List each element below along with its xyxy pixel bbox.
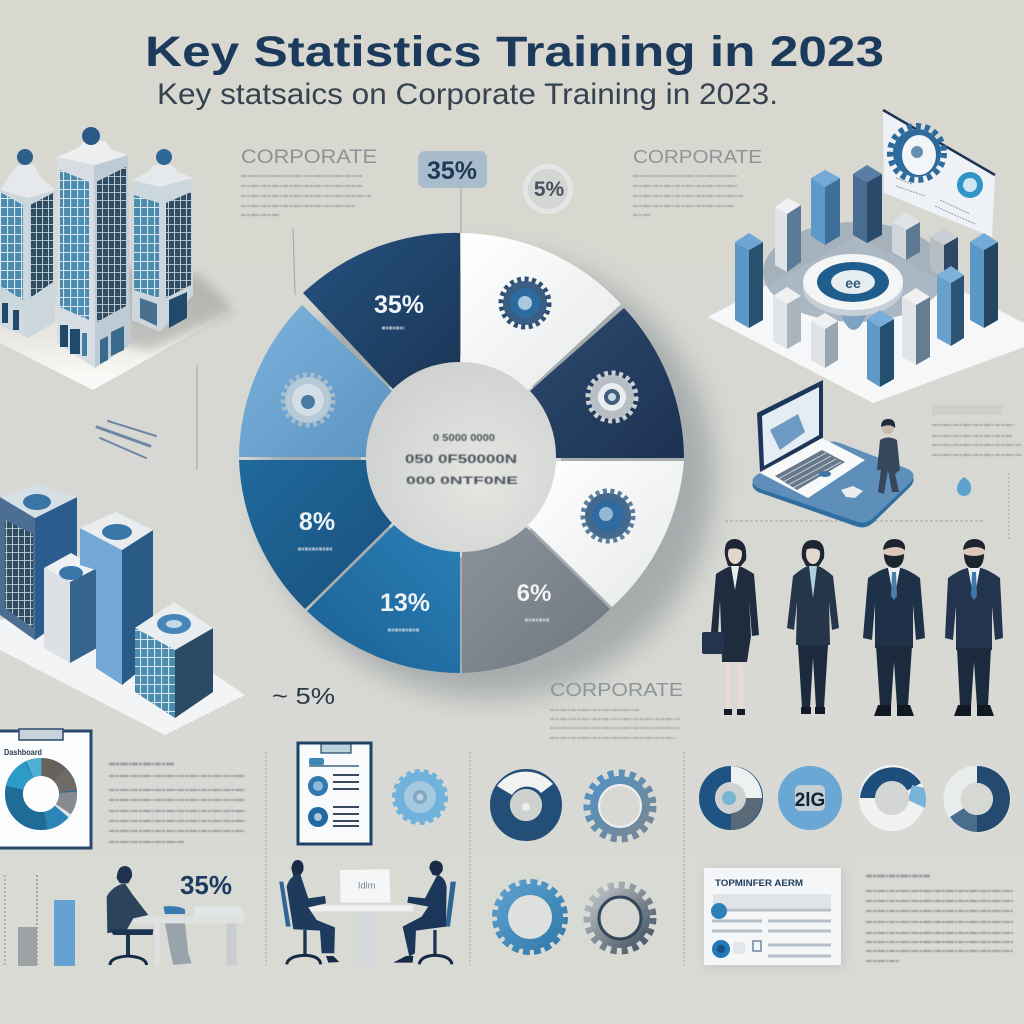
bar: back right white xyxy=(892,212,920,260)
icon: gear blue gray xyxy=(587,773,653,839)
panel: clipboard with donut xyxy=(0,729,91,848)
badge: 35%: 35% xyxy=(427,157,477,185)
panel: laptop and person xyxy=(752,380,914,527)
screen xyxy=(883,110,995,237)
icon: blue badge: 2lG xyxy=(795,790,825,811)
label: corporate lower: CORPORATE xyxy=(550,680,683,700)
text: donut centre xyxy=(405,433,518,487)
text: donut centre: 0 5000 0000 xyxy=(433,433,495,444)
text block: clipboard note xyxy=(109,764,245,842)
block: front xyxy=(135,602,213,718)
segment: navy right xyxy=(530,308,684,458)
icon: blue badge xyxy=(778,766,842,830)
text block: corporate right xyxy=(633,176,744,215)
segment: gray xyxy=(462,527,610,673)
value: 8%: 8% xyxy=(299,508,335,536)
icon: gear blue xyxy=(495,882,565,952)
text block: right of laptop xyxy=(932,405,1022,455)
icon: donut white navy xyxy=(497,772,553,831)
block: tall xyxy=(0,484,77,640)
gear: navy segment xyxy=(588,373,636,421)
badge: 35% xyxy=(418,151,487,188)
bar: back right gray xyxy=(930,228,958,277)
segment: white lower right xyxy=(528,461,684,607)
text: donut centre: 050 0F50000N xyxy=(405,452,517,466)
chart: small bars xyxy=(5,875,75,966)
segment: navy top xyxy=(303,233,460,389)
text block: corporate left xyxy=(241,176,371,215)
bar: back white xyxy=(775,198,801,272)
bar: front white xyxy=(902,288,930,365)
panel: corporate buildings xyxy=(0,127,245,390)
scene: two people at table xyxy=(279,860,456,967)
panel: clipboard with list xyxy=(298,743,371,844)
chart: main donut xyxy=(239,233,714,698)
badge: 5%: 5% xyxy=(534,178,564,201)
segment: white top xyxy=(461,233,621,390)
bar: front left white xyxy=(773,287,801,349)
bar: front right blue xyxy=(937,266,964,346)
person: woman with briefcase xyxy=(702,539,759,715)
chart: clipboard donut xyxy=(3,756,79,832)
person: man right xyxy=(945,539,1003,716)
block: medium tall xyxy=(80,512,153,685)
icon: decorative slashes xyxy=(97,421,156,458)
bar: front centre white xyxy=(811,313,838,368)
gear: light blue segment xyxy=(283,375,333,425)
callout: 5%: ~ 5% xyxy=(272,683,335,709)
bar: right blue tall xyxy=(970,233,998,328)
text block: report note xyxy=(866,876,1013,961)
bar: back blue xyxy=(811,170,840,245)
panel: isometric bars with screen xyxy=(708,110,1024,403)
person: left seated xyxy=(279,860,339,964)
text: donut centre: 000 0NTF0NE xyxy=(406,475,518,487)
panel: report card: TOPMINFER AERM xyxy=(715,878,803,889)
scene: person at desk xyxy=(107,866,245,967)
label: corporate right: CORPORATE xyxy=(633,147,762,167)
bar: back navy xyxy=(853,165,882,243)
icon: drop xyxy=(957,477,971,496)
panel: buildings lower left xyxy=(0,484,245,735)
segment: light blue left xyxy=(239,305,392,457)
segment: dark blue left xyxy=(239,460,392,609)
icon: donut small 2 xyxy=(860,767,926,823)
person: right seated xyxy=(393,861,456,964)
bar: left blue tall xyxy=(735,233,763,328)
panel: report card xyxy=(704,868,843,967)
icon: gear gray xyxy=(587,885,653,951)
value: 13%: 13% xyxy=(380,589,430,617)
title: Key Statistics Training in 2023 xyxy=(145,28,884,76)
icon: donut small 1 xyxy=(707,766,762,830)
bar: front centre blue xyxy=(867,310,894,387)
label: corporate left: CORPORATE xyxy=(241,147,377,168)
person: man centre xyxy=(863,539,925,716)
badge: 5% xyxy=(523,164,573,214)
text block: corporate lower xyxy=(550,710,680,738)
gear: white segment top xyxy=(501,279,549,327)
centre dish: ee xyxy=(845,275,861,291)
laptop xyxy=(757,380,865,498)
value: 35%: 35% xyxy=(374,291,424,319)
panel: clipboard with donut: Dashboard xyxy=(4,748,42,757)
icon: light blue gear xyxy=(394,771,446,823)
value: 6%: 6% xyxy=(517,580,551,607)
person standing xyxy=(877,419,900,494)
centre dish xyxy=(803,254,903,330)
callout: 35%: 35% xyxy=(180,870,232,900)
subtitle: Key statsaics on Corporate Training in 2023. xyxy=(157,78,778,111)
scene: two people at table: Idlm xyxy=(358,880,376,890)
gear: white segment lower xyxy=(583,491,633,541)
icon: donut small 3 xyxy=(950,766,1010,832)
block: small xyxy=(44,553,97,663)
segment: blue bottom xyxy=(307,525,460,673)
person: woman xyxy=(787,540,839,714)
panel: business people xyxy=(702,539,1003,716)
